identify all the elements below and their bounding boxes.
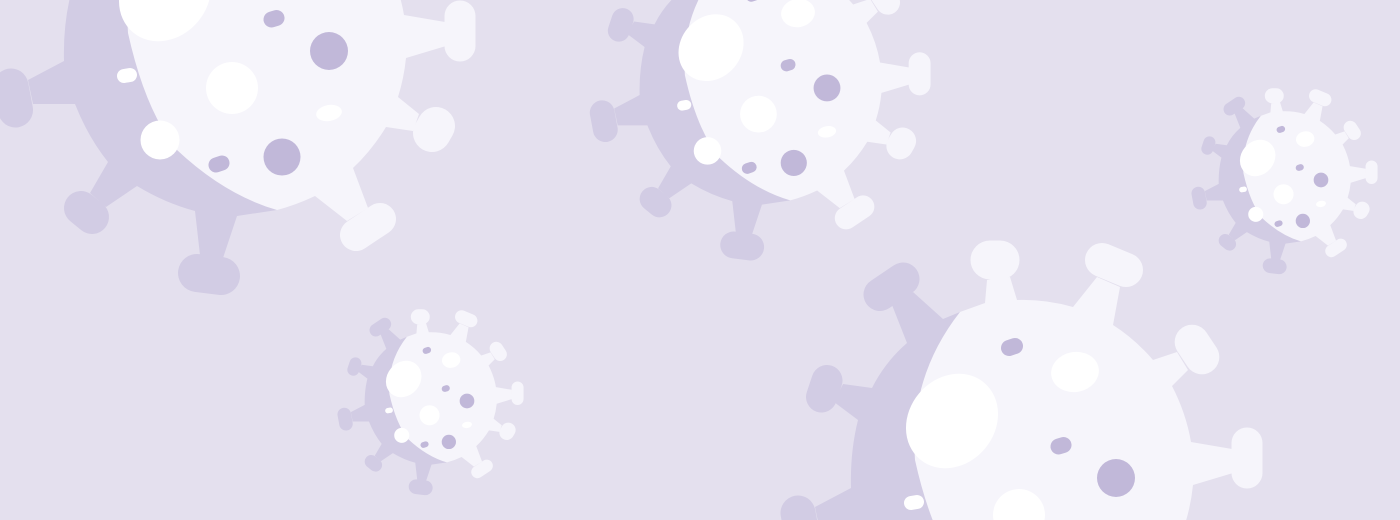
virus: small top-right: [1198, 96, 1372, 267]
virus light body: [1243, 96, 1372, 251]
virus shadow side: [344, 324, 447, 488]
virus shadow side: [602, 0, 790, 247]
virus light body: [684, 0, 920, 218]
virus: small lower-centre-left: [344, 317, 518, 488]
virus surface spots: [1233, 129, 1328, 228]
virus light body: [127, 0, 460, 235]
virus surface spots: [665, 0, 840, 176]
virus light body: [914, 260, 1247, 520]
virus shadow side: [798, 279, 1064, 520]
virus: large top-left: [11, 0, 460, 276]
virus surface spots: [887, 346, 1135, 520]
virus: large bottom-right: [798, 260, 1247, 520]
virus surface spots: [379, 350, 474, 449]
virus shadow side: [1198, 103, 1301, 267]
virus surface spots: [100, 0, 348, 176]
virus shadow side: [11, 0, 277, 276]
virus light body: [389, 317, 518, 472]
virus: medium top-centre: [602, 0, 920, 247]
